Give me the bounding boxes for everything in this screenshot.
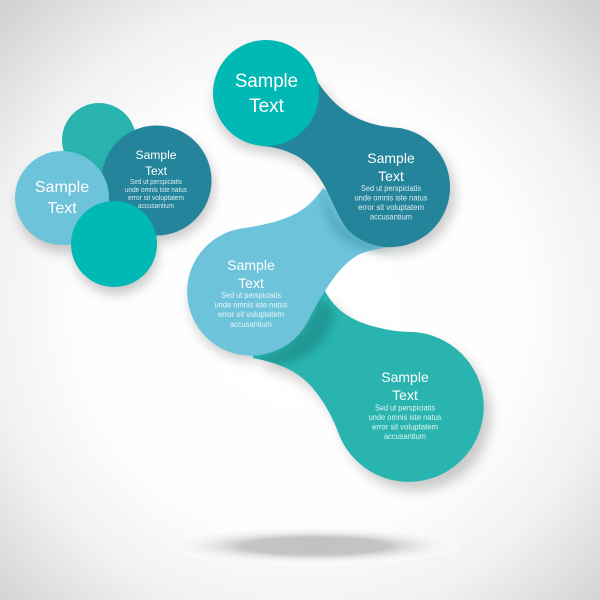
panel: light blue blob step 3: accusantium	[230, 320, 272, 329]
panel: left circle cluster	[15, 103, 214, 294]
panel: teal circle step 1: Sample	[235, 71, 298, 92]
panel: green blob step 4: Sample	[381, 369, 429, 385]
panel: green blob step 4: error sit voluptatem	[372, 422, 438, 432]
dark circle with text	[102, 126, 212, 236]
shadow of light blob on green blob	[253, 298, 334, 364]
dark circle with text: Sed ut perspiciatis	[130, 179, 182, 186]
teal front circle	[71, 201, 157, 287]
panel: teal circle step 1	[213, 40, 319, 146]
ground shadow	[172, 528, 458, 564]
panel: dark blob step 2: accusantium	[370, 212, 412, 222]
panel: dark blob step 2: error sit voluptatem	[358, 203, 424, 212]
panel: dark blob step 2: Sample	[367, 150, 415, 166]
panel: green blob step 4: unde omnis iste natus	[368, 413, 442, 422]
dark circle with text: accusantium	[138, 203, 174, 210]
shadow of dark blob on light blob	[323, 190, 395, 251]
panel: light blue blob step 3: Text	[238, 275, 264, 291]
panel: light blue blob step 3: error sit voluptatem	[218, 310, 284, 319]
dark circle with text: unde omnis iste natus	[125, 187, 187, 194]
blob shadows	[190, 52, 491, 491]
panel: light blue blob step 3: Sample	[227, 257, 275, 273]
icon: green back circle	[62, 103, 136, 177]
panel: light blue blob step 3: unde omnis iste natus	[214, 300, 288, 310]
panel: dark blob step 2: Sed ut perspiciatis	[361, 184, 421, 193]
light circle with text: Sample	[35, 179, 89, 196]
dark circle with text: error sit voluptatem	[128, 195, 184, 202]
panel: dark blob step 2: unde omnis iste natus	[354, 194, 428, 202]
panel: light blue blob step 3	[187, 188, 395, 356]
panel: green blob step 4: Text	[392, 387, 418, 403]
panel: green blob step 4	[250, 291, 484, 482]
panel: dark blob step 2	[262, 76, 450, 247]
panel: green blob step 4: accusantium	[384, 432, 426, 441]
panel: dark blob step 2: Text	[378, 168, 404, 184]
panel: light blue blob step 3: Sed ut perspiciatis	[221, 291, 281, 300]
light circle with text: Text	[47, 200, 77, 217]
panel: teal circle step 1: Text	[249, 96, 285, 117]
light circle with text	[15, 151, 109, 245]
dark circle with text: Sample	[136, 148, 177, 162]
circle shadows	[18, 133, 214, 294]
panel: green blob step 4: Sed ut perspiciatis	[375, 404, 435, 412]
dark circle with text: Text	[145, 164, 168, 178]
